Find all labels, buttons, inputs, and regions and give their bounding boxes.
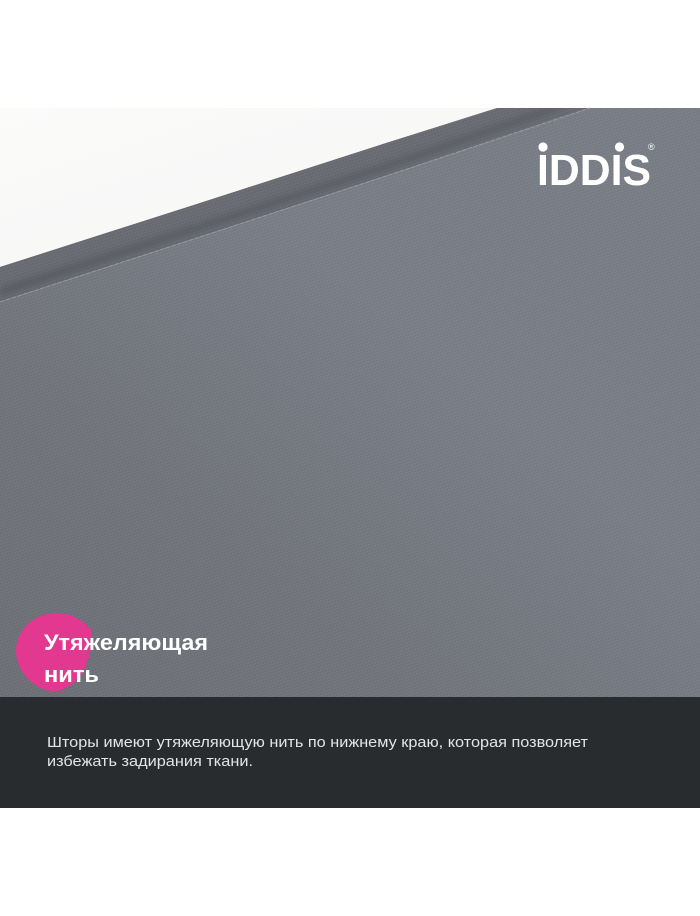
accent: pink blob [16, 613, 92, 691]
caption band [0, 697, 700, 808]
caption text: избежать задирания ткани. [47, 753, 253, 770]
heading: нить [44, 662, 99, 687]
heading: Утяжеляющая [44, 630, 208, 655]
caption text: Шторы имеют утяжеляющую нить по нижнему краю, которая позволяет [47, 734, 588, 751]
caption text [47, 734, 588, 770]
logo: IDDIS: IDDIS [537, 146, 651, 195]
heading [44, 630, 208, 687]
photo: grey fabric roller blind [0, 108, 700, 697]
logo: IDDIS: ® [648, 142, 655, 152]
